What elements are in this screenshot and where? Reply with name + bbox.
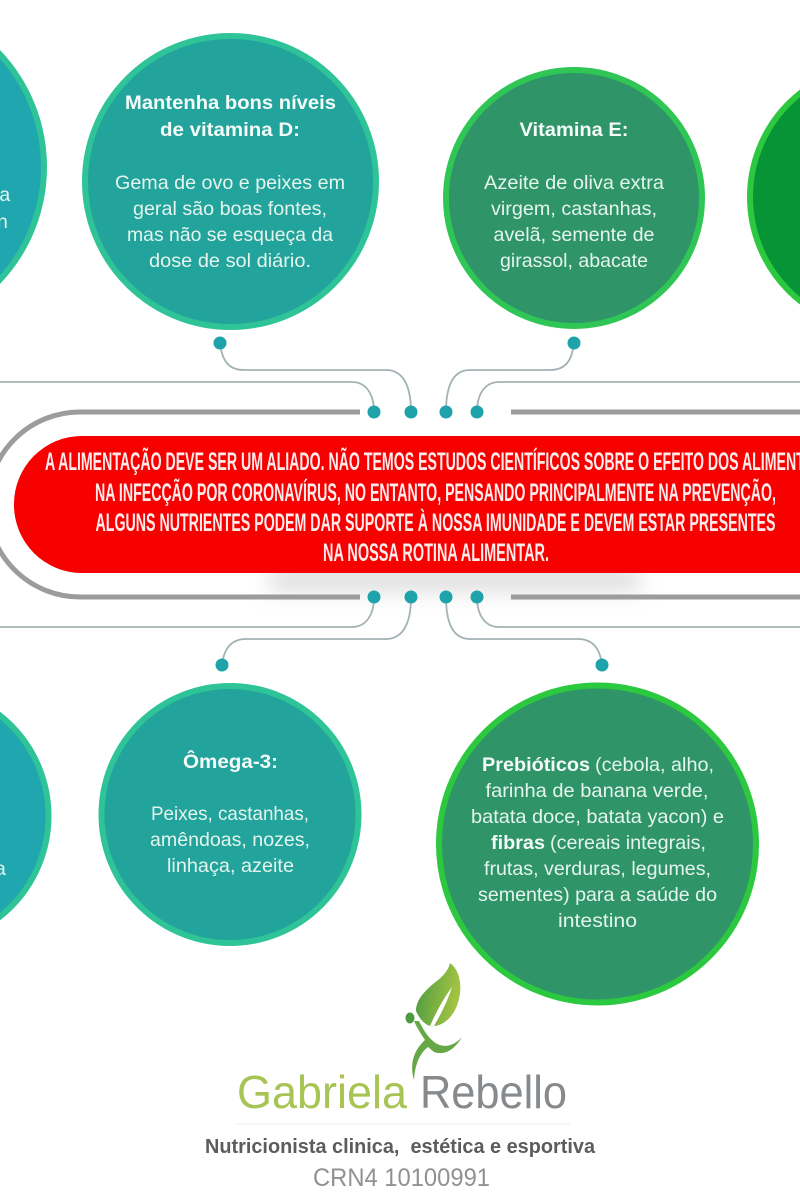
panel: omega-3 circle	[102, 686, 358, 943]
panel: prebiotics and fibers circle: Prebióticos	[482, 755, 590, 776]
panel: vitamin E circle: Vitamina E:	[520, 120, 628, 141]
grey frame around banner	[0, 412, 800, 597]
panel: omega-3 circle: Ômega-3:	[183, 751, 278, 773]
panel: vitamin E circle: Azeite de oliva extra	[484, 172, 664, 194]
panel: omega-3 circle: linhaça, azeite	[167, 855, 294, 877]
panel: prebiotics and fibers circle: intestino	[558, 910, 637, 932]
text: registration number: CRN4 10100991	[313, 1164, 490, 1192]
panel: vitamin D circle: dose de sol diário.	[149, 250, 311, 272]
panel: top-right partial circle	[750, 64, 800, 330]
shadow under red banner	[270, 566, 640, 592]
panel: vitamin D circle	[85, 36, 376, 327]
connectors: bottom	[0, 590, 800, 672]
panel: vitamin E circle: virgem, castanhas,	[491, 198, 657, 220]
logo: Gabriela Rebello	[237, 963, 567, 1118]
panel: prebiotics and fibers circle: farinha de banana verde,	[486, 780, 708, 802]
panel: vitamin D circle: mas não se esqueça da	[127, 224, 333, 246]
panel: top-left partial circle	[0, 1, 44, 333]
panel: prebiotics and fibers circle	[439, 686, 756, 1002]
panel: prebiotics and fibers circle: sementes) para a saúde do	[478, 884, 717, 906]
panel: vitamin D circle: de vitamina D:	[160, 120, 300, 141]
panel: prebiotics and fibers circle: fibras	[491, 833, 545, 854]
logo underline	[235, 1124, 570, 1125]
panel: vitamin D circle: geral são boas fontes,	[133, 198, 327, 220]
panel: vitamin E circle: girassol, abacate	[500, 250, 648, 272]
panel: omega-3 circle: Peixes, castanhas,	[151, 803, 309, 825]
panel: prebiotics and fibers circle: frutas, verduras, legumes,	[484, 858, 711, 880]
logo: Gabriela Rebello: Gabriela	[237, 1066, 407, 1118]
connectors: top	[0, 336, 800, 418]
icon: leaf and running figure	[406, 963, 462, 1080]
panel: vitamin E circle	[446, 70, 702, 326]
logo: Gabriela Rebello: Rebello	[420, 1066, 567, 1118]
panel: bottom-left partial circle	[0, 688, 48, 944]
panel: vitamin E circle: avelã, semente de	[494, 224, 654, 246]
text: profession: Nutricionista clinica, estética e esportiva	[205, 1136, 596, 1158]
panel: vitamin D circle: Mantenha bons níveis	[125, 93, 336, 114]
panel: omega-3 circle: amêndoas, nozes,	[150, 829, 310, 851]
callout: red banner: NA NOSSA ROTINA ALIMENTAR.	[323, 539, 549, 567]
callout: red banner	[14, 436, 800, 573]
panel: prebiotics and fibers circle: (cereais integrais,	[550, 832, 706, 854]
panel: vitamin D circle: Gema de ovo e peixes em	[115, 172, 345, 194]
panel: prebiotics and fibers circle: (cebola, alho,	[595, 754, 714, 776]
panel: prebiotics and fibers circle: batata doce, batata yacon) e	[471, 806, 724, 828]
